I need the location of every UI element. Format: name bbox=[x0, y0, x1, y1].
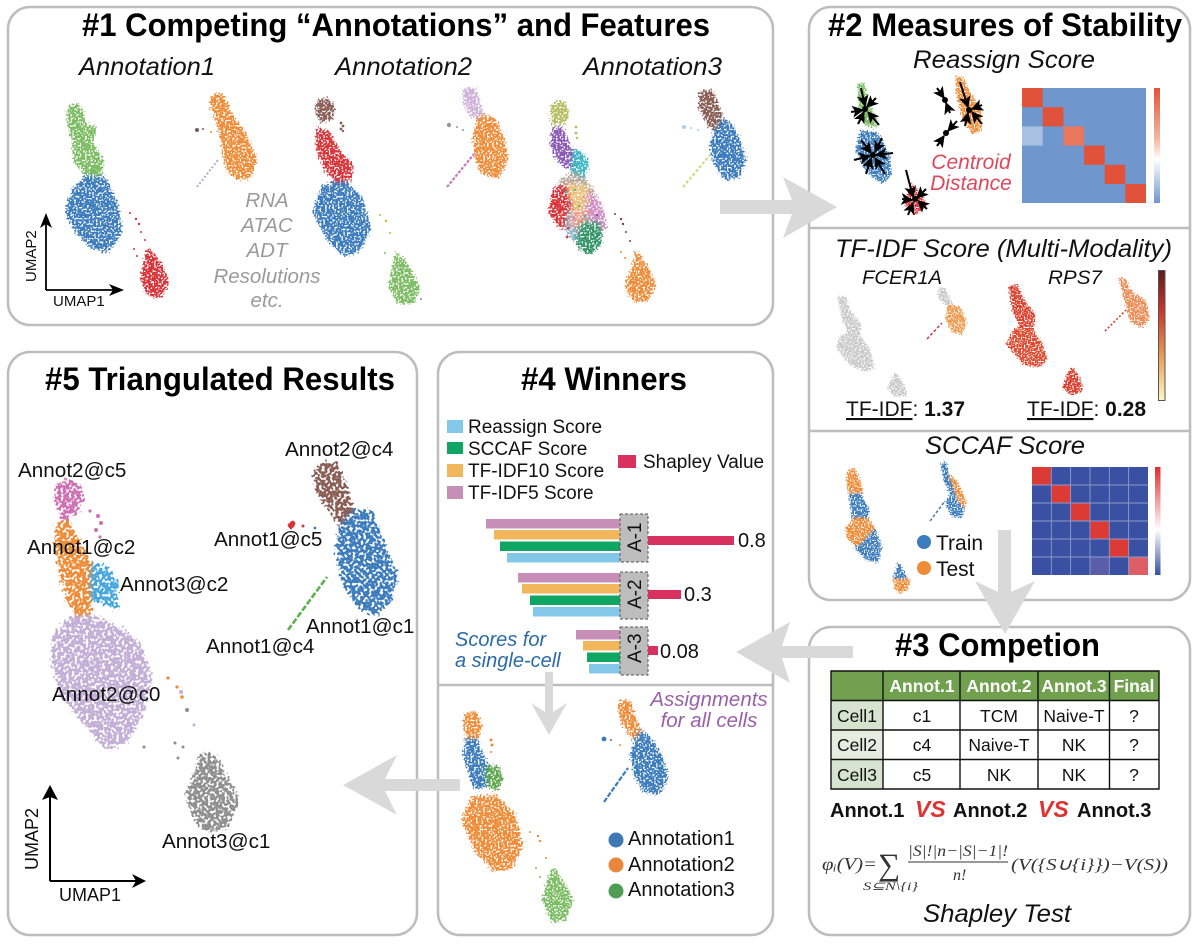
scatter: RPS7 trail bbox=[1105, 310, 1126, 331]
scatter: SCCAF train and test bbox=[845, 462, 967, 594]
legend: scores: SCCAF Score bbox=[468, 439, 587, 460]
scatter: Annotation1 UMAP bbox=[65, 93, 257, 298]
comparison line: Annot.1 bbox=[830, 800, 904, 822]
formula: Shapley value bbox=[822, 843, 1168, 893]
bar group: A-3: A-3 bbox=[625, 633, 646, 663]
scatter: reassign UMAP bbox=[855, 76, 982, 216]
arrow: panel 1 to panel 2 bbox=[720, 177, 837, 238]
cluster labels: Annot3@c1 bbox=[162, 830, 270, 853]
legend: annotations: Annotation2 bbox=[628, 854, 735, 876]
table: annotations by cell bbox=[831, 671, 1159, 789]
formula: Shapley value: (V({S∪{i}})−V(S)) bbox=[1011, 855, 1168, 874]
legend: train / test: Train bbox=[936, 532, 983, 555]
panel: #3 competition bbox=[809, 627, 1190, 935]
heading: panel 3: #3 Competion bbox=[895, 627, 1100, 663]
legend: scores bbox=[447, 417, 764, 504]
scatter: triangulated clusters bbox=[50, 460, 398, 833]
table: annotations by cell: Cell3 bbox=[837, 765, 877, 785]
label: centroid distance: Centroid bbox=[931, 151, 1012, 174]
heading: panel 5: #5 Triangulated Results bbox=[45, 361, 395, 397]
cluster labels bbox=[18, 438, 414, 853]
bar group: A-1: 0.8 bbox=[738, 530, 766, 552]
table: annotations by cell: ? bbox=[1129, 765, 1139, 785]
legend: annotations: Annotation3 bbox=[628, 879, 735, 901]
label: FCER1A: FCER1A bbox=[862, 268, 942, 289]
heading: panel 2: #2 Measures of Stability bbox=[828, 7, 1182, 43]
bar group: A-3 bbox=[576, 627, 699, 675]
feature list: ADT bbox=[244, 239, 289, 262]
legend: scores: Shapley Value bbox=[643, 452, 764, 473]
UMAP axes bbox=[23, 213, 124, 310]
note: scores for a single cell bbox=[455, 629, 561, 672]
comparison line: Annot.2 bbox=[953, 800, 1027, 822]
scatter: FCER1A expression bbox=[836, 287, 967, 397]
note: assignments for all cells: Assignments bbox=[648, 688, 768, 711]
heatmap: SCCAF bbox=[1032, 467, 1148, 575]
cluster labels: Annot3@c2 bbox=[120, 573, 228, 596]
scatter: Annotation2 UMAP bbox=[313, 87, 508, 304]
arrow: panel 2 to panel 3 bbox=[975, 530, 1035, 634]
heatmap: reassign score bbox=[1022, 88, 1146, 203]
label: centroid distance: Distance bbox=[930, 172, 1012, 195]
bar group: A-1 bbox=[486, 514, 766, 562]
formula: Shapley value: S⊆N\{i} bbox=[863, 879, 918, 893]
score: RPS7 TF-IDF: TF-IDF: 0.28 bbox=[1027, 398, 1146, 421]
caption: Shapley test: Shapley Test bbox=[923, 900, 1072, 928]
table: annotations by cell: ? bbox=[1129, 706, 1139, 726]
feature list bbox=[213, 189, 321, 312]
label: RPS7: RPS7 bbox=[1048, 268, 1104, 289]
table: annotations by cell: NK bbox=[1062, 765, 1086, 785]
bar group: A-2 bbox=[518, 572, 712, 619]
panel: #4 winners bbox=[438, 352, 773, 935]
heading: panel 1: #1 Competing “Annotations” and Features bbox=[82, 7, 710, 43]
cluster labels: Annot1@c4 bbox=[206, 635, 314, 658]
table: annotations by cell: Cell2 bbox=[837, 735, 877, 755]
centroid points bbox=[862, 97, 972, 202]
table: annotations by cell: Naive-T bbox=[968, 735, 1030, 755]
legend: annotations: Annotation1 bbox=[628, 828, 735, 850]
legend: scores: TF-IDF10 Score bbox=[468, 461, 604, 482]
subheading: Annotation2: Annotation2 bbox=[333, 53, 472, 81]
legend: scores: Reassign Score bbox=[468, 417, 602, 438]
arrow: single-cell to all cells bbox=[531, 672, 567, 735]
subheading: SCCAF score: SCCAF Score bbox=[925, 432, 1085, 460]
note: scores for a single cell: Scores for bbox=[455, 629, 547, 651]
UMAP axes: UMAP1 bbox=[59, 885, 121, 905]
bar group: A-1: A-1 bbox=[625, 522, 646, 552]
legend: train / test bbox=[917, 532, 983, 581]
table: annotations by cell: ? bbox=[1129, 735, 1139, 755]
cluster labels: Annot1@c2 bbox=[27, 536, 135, 559]
colorbar: reassign bbox=[1154, 88, 1160, 203]
arrows: centroid distance bbox=[851, 82, 982, 215]
table: annotations by cell: Annot.2 bbox=[966, 676, 1032, 696]
heading: panel 4: #4 Winners bbox=[521, 361, 687, 397]
score: FCER1A TF-IDF: TF-IDF: 1.37 bbox=[846, 398, 965, 421]
table: annotations by cell: c5 bbox=[913, 765, 931, 785]
note: scores for a single cell: a single-cell bbox=[455, 650, 561, 672]
scatter: triangulated outliers bbox=[88, 509, 327, 760]
formula: Shapley value: ∑ bbox=[878, 847, 900, 882]
colorbar: TF-IDF bbox=[1158, 270, 1165, 400]
comparison line: VS bbox=[915, 796, 946, 822]
arrow: panel 4 to panel 5 bbox=[343, 755, 460, 815]
table: annotations by cell: TCM bbox=[980, 706, 1018, 726]
formula: Shapley value: φᵢ(V)= bbox=[822, 854, 877, 875]
panel: #5 triangulated results bbox=[8, 352, 417, 935]
table: annotations by cell: NK bbox=[1062, 735, 1086, 755]
panel: #2 measures of stability bbox=[809, 7, 1190, 600]
scatter: RPS7 expression bbox=[1006, 277, 1150, 396]
legend: train / test: Test bbox=[936, 558, 975, 581]
scatter: winning annotation assignments bbox=[462, 700, 668, 922]
cluster labels: Annot1@c1 bbox=[306, 615, 414, 638]
subheading: TF-IDF score: TF-IDF Score (Multi-Modality) bbox=[835, 235, 1172, 263]
table: annotations by cell: NK bbox=[987, 765, 1011, 785]
label: centroid distance bbox=[930, 151, 1012, 195]
subheading: Annotation1: Annotation1 bbox=[77, 53, 215, 81]
formula: Shapley value: |S|!|n−|S|−1|! bbox=[908, 843, 1008, 860]
note: assignments for all cells: for all cells bbox=[661, 709, 757, 732]
feature list: ATAC bbox=[239, 214, 293, 237]
panel: #1 competing annotations and features bbox=[8, 7, 773, 325]
comparison line bbox=[830, 796, 1151, 822]
scatter: Annotation1 outliers bbox=[129, 128, 218, 257]
scatter: Annotation3 mixed cells bbox=[551, 125, 710, 259]
table: annotations by cell: c4 bbox=[913, 735, 932, 755]
UMAP axes: UMAP2 bbox=[22, 808, 42, 870]
legend: scores: TF-IDF5 Score bbox=[468, 483, 594, 504]
comparison line: Annot.3 bbox=[1077, 800, 1151, 822]
bar group: A-2: 0.3 bbox=[684, 584, 712, 606]
subheading: Reassign Score: Reassign Score bbox=[913, 46, 1095, 74]
formula: Shapley value: n! bbox=[953, 867, 966, 884]
table: annotations by cell: c1 bbox=[913, 706, 931, 726]
scatter: SCCAF trail bbox=[930, 501, 945, 521]
table: annotations by cell: Annot.3 bbox=[1041, 676, 1107, 696]
feature list: RNA bbox=[245, 189, 289, 212]
scatter: FCER1A trail bbox=[927, 323, 942, 339]
scatter: Annotation3 UMAP bbox=[548, 90, 746, 302]
cluster labels: Annot2@c0 bbox=[52, 683, 160, 706]
feature list: etc. bbox=[250, 289, 284, 312]
scatter: assignment outliers bbox=[490, 737, 628, 878]
table: annotations by cell: Naive-T bbox=[1043, 706, 1105, 726]
table: annotations by cell: Cell1 bbox=[837, 706, 877, 726]
comparison line: VS bbox=[1038, 796, 1069, 822]
table: annotations by cell: Annot.1 bbox=[889, 676, 955, 696]
cluster labels: Annot1@c5 bbox=[214, 528, 322, 551]
legend: annotations bbox=[608, 828, 735, 901]
colorbar: SCCAF bbox=[1155, 467, 1160, 575]
UMAP axes: UMAP1 bbox=[53, 293, 105, 310]
subheading: Annotation3: Annotation3 bbox=[581, 53, 722, 81]
UMAP axes bbox=[22, 785, 146, 905]
cluster labels: Annot2@c5 bbox=[18, 459, 126, 482]
table: annotations by cell: Final bbox=[1114, 676, 1154, 696]
UMAP axes: UMAP2 bbox=[23, 230, 40, 282]
feature list: Resolutions bbox=[213, 265, 321, 288]
scatter: Annotation2 outliers bbox=[340, 122, 474, 300]
note: assignments for all cells bbox=[648, 688, 768, 732]
cluster labels: Annot2@c4 bbox=[285, 438, 393, 461]
bar group: A-3: 0.08 bbox=[660, 641, 699, 663]
arrow: panel 3 to panel 4 bbox=[736, 622, 853, 683]
bar group: A-2: A-2 bbox=[625, 579, 646, 609]
